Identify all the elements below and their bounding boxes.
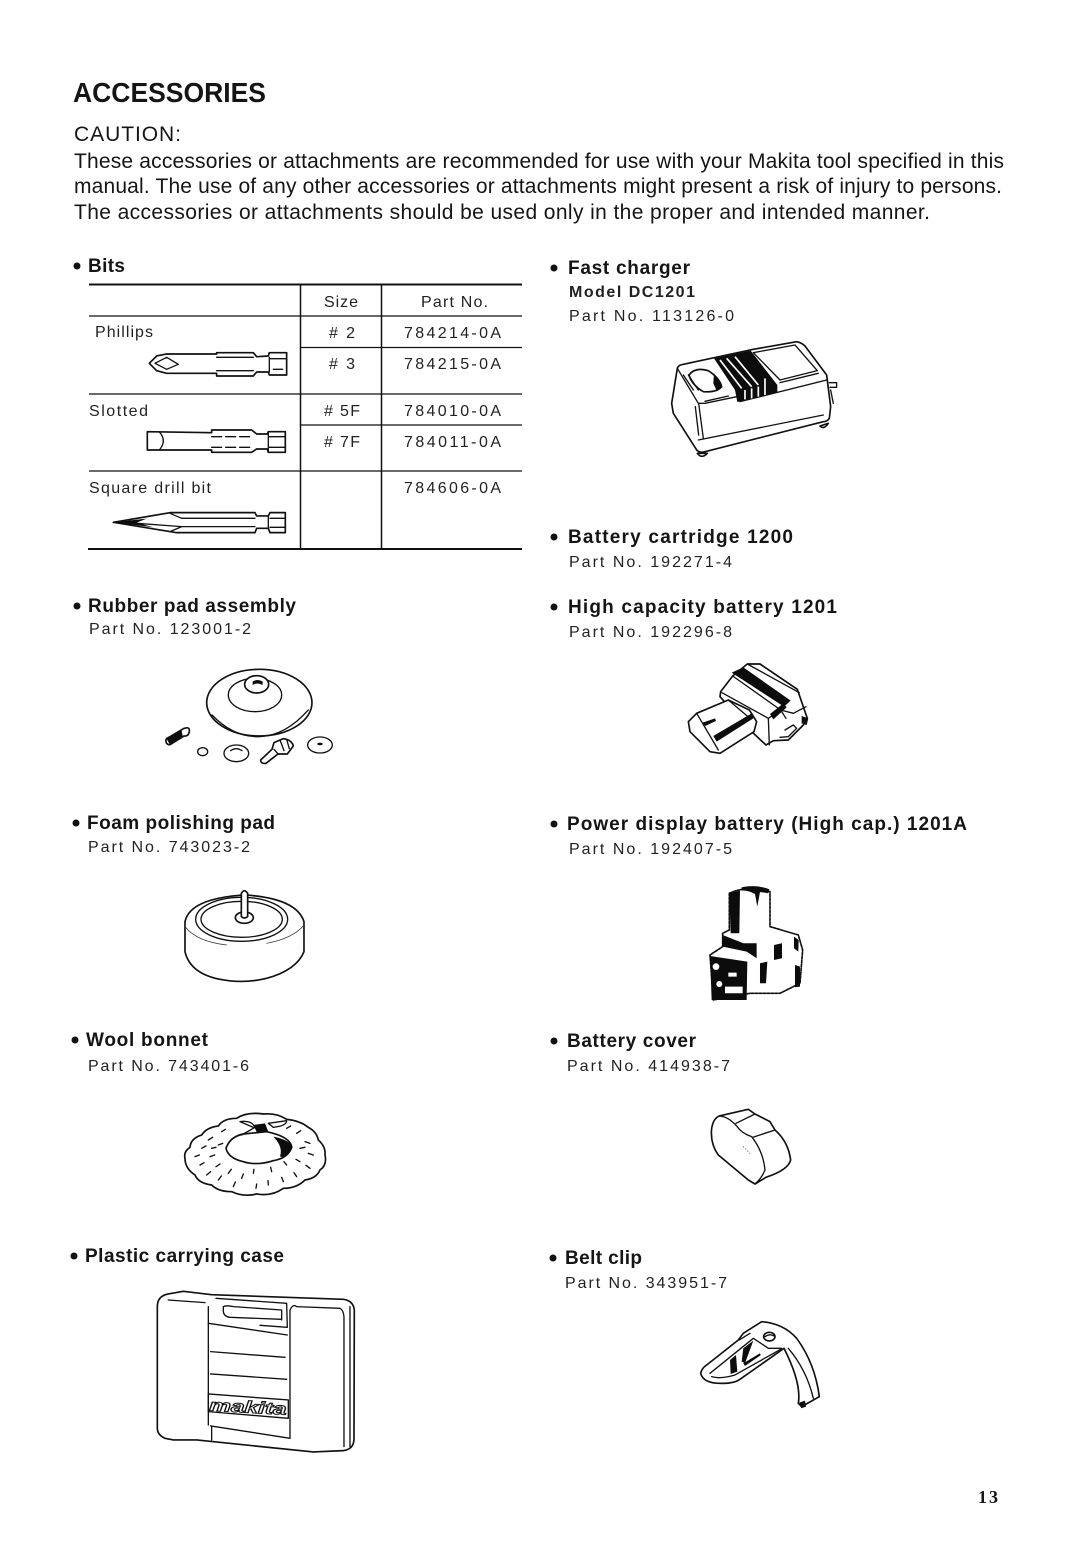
heading: rubber pad: Rubber pad assembly [88,596,296,617]
parts table: 784011-0A [404,434,501,451]
panel: battery cover [550,1031,791,1184]
icon: phillips bit [149,353,287,376]
part number: high capacity battery: Part No. 192296-8 [569,624,732,641]
heading: foam pad: Foam polishing pad [87,813,275,834]
icon: battery cover [711,1109,791,1184]
heading: high capacity battery: High capacity battery 1201 [568,597,837,618]
part number: rubber pad: Part No. 123001-2 [89,621,251,638]
panel: high capacity battery [550,597,837,753]
panel: power display battery [550,814,967,1000]
caution text block: CAUTION: [74,123,181,146]
icon: fast charger [672,342,837,456]
heading: wool bonnet: Wool bonnet [86,1030,209,1051]
icon: power display battery [710,886,803,1000]
icon: foam pad [185,891,304,981]
caution text block [74,123,1004,224]
parts table: # 5F [324,403,360,420]
panel: belt clip [550,1248,819,1408]
heading: fast charger: Fast charger [568,258,691,279]
panel: wool bonnet [72,1030,326,1195]
parts table: 784215-0A [404,356,501,373]
part number: belt clip: Part No. 343951-7 [565,1275,727,1292]
heading: plastic carrying case: Plastic carrying case [85,1246,284,1267]
parts table: 784606-0A [404,480,501,497]
heading: power display battery: Power display battery (High cap.) 1201A [567,814,967,835]
title: ACCESSORIES [73,77,266,108]
icon: slotted bit [147,430,285,452]
heading: bits: Bits [88,256,125,277]
parts table: 784214-0A [404,325,501,342]
caution text block: manual. The use of any other accessories or attachments might present a risk of injury to persons. [74,175,1002,198]
panel: rubber pad assembly [74,596,332,763]
part number: power display battery: Part No. 192407-5 [569,841,732,858]
parts table [88,284,522,549]
part number: foam pad: Part No. 743023-2 [88,839,250,856]
heading: battery cartridge: Battery cartridge 1200 [568,527,793,548]
caution text block: The accessories or attachments should be used only in the proper and intended manner. [74,201,930,224]
parts table: Phillips [95,324,153,341]
icon: carrying case [157,1291,354,1452]
logo text: makita [209,1396,287,1419]
heading: battery cover: Battery cover [567,1031,697,1052]
page number: 13 [978,1487,998,1507]
part number: wool bonnet: Part No. 743401-6 [88,1058,249,1075]
icon: square drill bit [113,513,285,533]
parts table: # 2 [329,325,355,342]
panel: bits [74,256,522,549]
icon: rubber pad parts [166,669,332,763]
part number: battery cover: Part No. 414938-7 [567,1058,730,1075]
part number: charger: Part No. 113126-0 [569,308,734,325]
parts table: Size [324,294,358,311]
parts table: # 7F [324,434,360,451]
model number: Model DC1201 [569,284,695,301]
parts table: Slotted [89,403,148,420]
panel: battery cartridge 1200 [550,527,793,571]
parts table: Part No. [421,294,488,311]
icon: battery [688,664,808,753]
panel: fast charger [550,258,837,456]
heading: belt clip: Belt clip [565,1248,642,1269]
parts table: # 3 [329,356,355,373]
part number: battery cartridge: Part No. 192271-4 [569,554,732,571]
panel: plastic carrying case [70,1246,354,1452]
icon: wool bonnet [185,1113,326,1195]
parts table: Square drill bit [89,480,212,497]
icon: belt clip [701,1322,819,1408]
panel: foam polishing pad [72,813,304,981]
parts table: 784010-0A [404,403,501,420]
caution text block: These accessories or attachments are recommended for use with your Makita tool specified in this [74,150,1004,173]
